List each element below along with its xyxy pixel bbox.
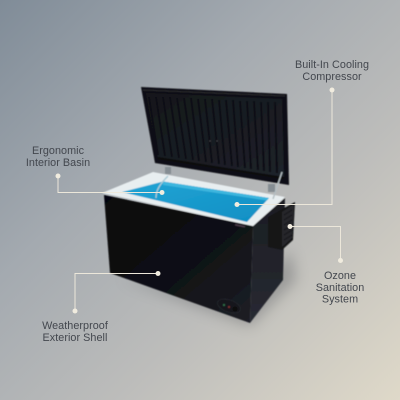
callout: Built-In Cooling Compressor bbox=[234, 59, 369, 207]
dots bbox=[234, 88, 334, 207]
callout: Ergonomic Interior Basin bbox=[26, 145, 164, 195]
floor shadow bbox=[120, 250, 296, 326]
control panel bbox=[216, 296, 242, 316]
white rim bbox=[102, 172, 285, 226]
blue basin bbox=[122, 182, 269, 222]
label: Built-In Cooling Compressor: Compressor bbox=[302, 71, 362, 83]
dots bbox=[56, 174, 164, 195]
callout: Ozone Sanitation System bbox=[288, 224, 364, 306]
label: Built-In Cooling Compressor: Built-In Cooling bbox=[295, 59, 369, 71]
dots bbox=[72, 271, 160, 314]
leader line bbox=[75, 274, 158, 311]
body side bbox=[250, 198, 285, 323]
hinges bbox=[165, 167, 275, 192]
label: Weatherproof Exterior Shell: Exterior Shell bbox=[43, 332, 107, 344]
label: Ozone Sanitation System: Ozone bbox=[324, 270, 356, 282]
label: Weatherproof Exterior Shell: Weatherproof bbox=[42, 320, 109, 332]
logo bbox=[235, 224, 245, 228]
leader line bbox=[58, 176, 162, 192]
leader line bbox=[290, 226, 340, 260]
dots bbox=[288, 224, 343, 263]
compressor bbox=[268, 202, 295, 250]
hinge rods bbox=[156, 172, 282, 199]
freezer bbox=[102, 87, 295, 323]
label: Ergonomic Interior Basin: Interior Basin bbox=[26, 157, 90, 169]
label: Ergonomic Interior Basin: Ergonomic bbox=[32, 145, 85, 157]
callout: Weatherproof Exterior Shell bbox=[42, 271, 160, 344]
leader line bbox=[237, 90, 332, 204]
body front bbox=[104, 195, 253, 323]
label: Ozone Sanitation System: Sanitation bbox=[316, 282, 364, 294]
label: Ozone Sanitation System: System bbox=[322, 294, 358, 306]
freezer lid bbox=[141, 87, 289, 185]
